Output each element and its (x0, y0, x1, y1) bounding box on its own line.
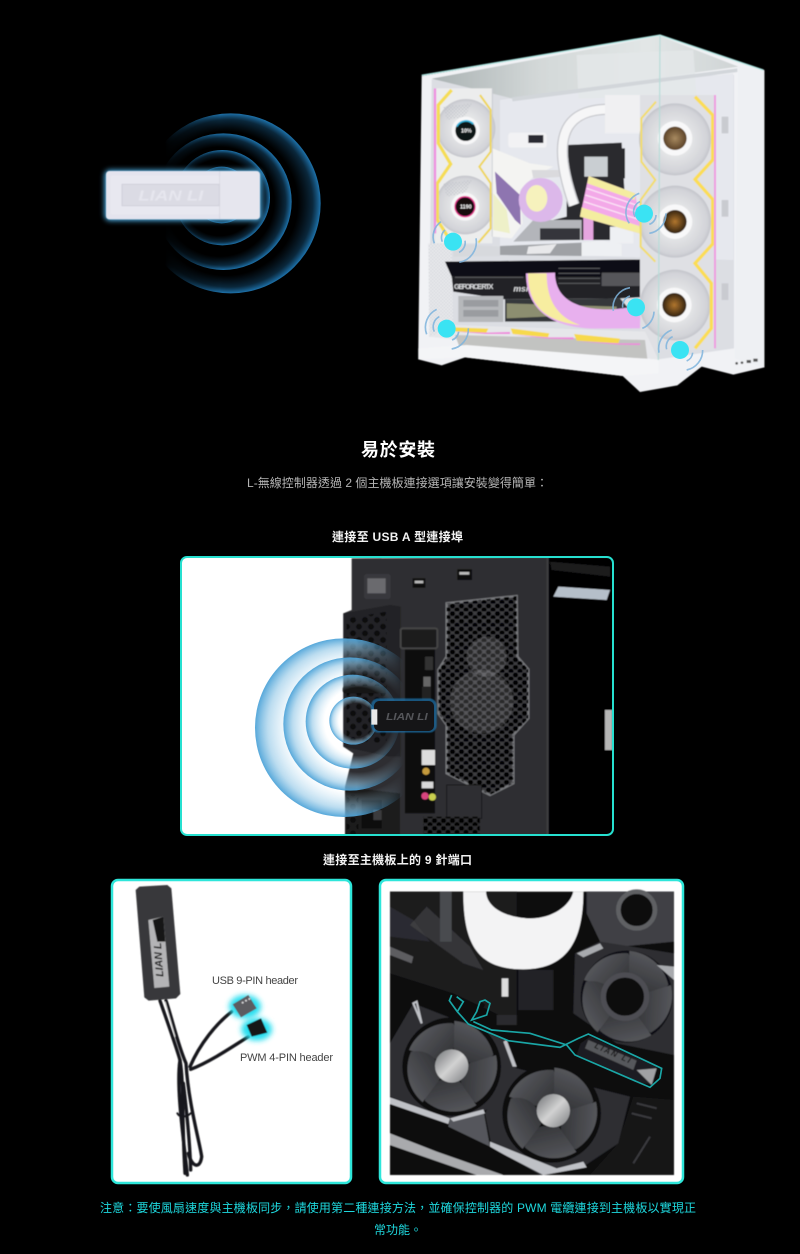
graphics card: msi (513, 283, 529, 293)
graphics fan left (390, 1002, 517, 1127)
dongle logo: LIAN L (152, 942, 166, 977)
panel: motherboard photo (380, 880, 687, 1183)
plate (447, 785, 482, 818)
cyan cable outline (449, 995, 662, 1087)
right fan column (639, 95, 728, 350)
signal waves (168, 113, 321, 294)
PCIe riser cable (526, 273, 641, 329)
middle right fan (572, 942, 687, 1057)
hotspot arcs (425, 193, 703, 370)
graphics fan right (448, 1059, 630, 1175)
case rear (343, 557, 547, 835)
signal waves (255, 638, 437, 817)
power bracket (345, 787, 400, 835)
panel border (181, 557, 613, 835)
left fan column: 1190 (460, 205, 472, 211)
heading: USB A: 連接至 USB A 型連接埠 (332, 529, 463, 544)
rear bar (512, 68, 737, 101)
cable wires (165, 1002, 175, 1037)
black USB dongle: LIAN LI (386, 712, 428, 723)
dongle glow (105, 170, 261, 221)
24-pin cable (580, 176, 641, 234)
white cable coil (463, 892, 583, 969)
interior (429, 75, 734, 359)
panel: motherboard photo: LIAN LI (593, 1041, 633, 1065)
graphics card (445, 259, 657, 322)
IO strip (405, 648, 435, 813)
GPU bracket (500, 243, 582, 256)
dongle logo: LIAN LI (138, 189, 204, 205)
wireless hotspots (425, 193, 703, 370)
case floor (430, 325, 658, 359)
hotspot dots (438, 205, 689, 359)
graphics card: GEFORCE RTX (454, 282, 493, 291)
lower chassis (390, 1107, 540, 1175)
panel background (181, 557, 613, 835)
infographic canvas (100, 34, 766, 1236)
title: 易於安裝 (361, 439, 435, 460)
black USB dongle (371, 698, 437, 733)
AIO pump (519, 178, 563, 222)
subtitle: L-無線控制器透過 2 個主機板連接選項讓安裝變得簡單： (247, 475, 548, 490)
panel background (380, 880, 683, 1183)
cables (160, 1001, 248, 1175)
lower mesh (428, 243, 453, 337)
note line 2: 常功能。 (374, 1223, 422, 1237)
PWM 4-PIN connector (247, 1018, 267, 1037)
PC case with wireless points (418, 35, 764, 392)
panel background (112, 880, 351, 1183)
base strip (418, 345, 658, 376)
perforated bracket (343, 605, 401, 757)
USB 9-pin connector (233, 995, 257, 1017)
label: PWM header: PWM 4-PIN header (240, 1052, 333, 1064)
motherboard (493, 133, 633, 243)
case photo (418, 35, 764, 392)
back wall (500, 73, 733, 260)
white dongle body (106, 171, 260, 219)
interior window (547, 557, 613, 835)
top glass (432, 36, 738, 98)
panel: USB A photo (181, 557, 613, 835)
label: USB header: USB 9-PIN header (212, 975, 298, 987)
wireless dongle with signal waves (105, 113, 321, 293)
front IO ports (735, 359, 758, 365)
left fan column: 10% (461, 129, 472, 135)
dongle label (148, 917, 169, 988)
glass edges (422, 35, 763, 75)
heading: 9-pin: 連接至主機板上的 9 針端口 (323, 852, 472, 867)
motherboard (390, 892, 517, 1023)
top right fan (587, 892, 674, 948)
photo background (390, 892, 674, 1175)
note (100, 1200, 696, 1237)
connector glows (229, 995, 261, 1018)
panel: 9-pin cable (112, 880, 351, 1183)
connected dongle (577, 1037, 657, 1083)
case body (418, 35, 764, 392)
left fan column (435, 88, 495, 243)
dongle body (136, 885, 180, 1001)
rear of case photo (343, 557, 613, 835)
fan grille (438, 596, 528, 795)
cooling tubes (562, 109, 613, 205)
dark cables (457, 1001, 557, 1043)
note line 1: 注意：要使風扇速度與主機板同步，請使用第二種連接方法，並確保控制器的 PWM 電纜連接到主機板以實現正 (100, 1200, 696, 1215)
psu bracket top (364, 574, 391, 599)
right side panel (735, 67, 764, 367)
